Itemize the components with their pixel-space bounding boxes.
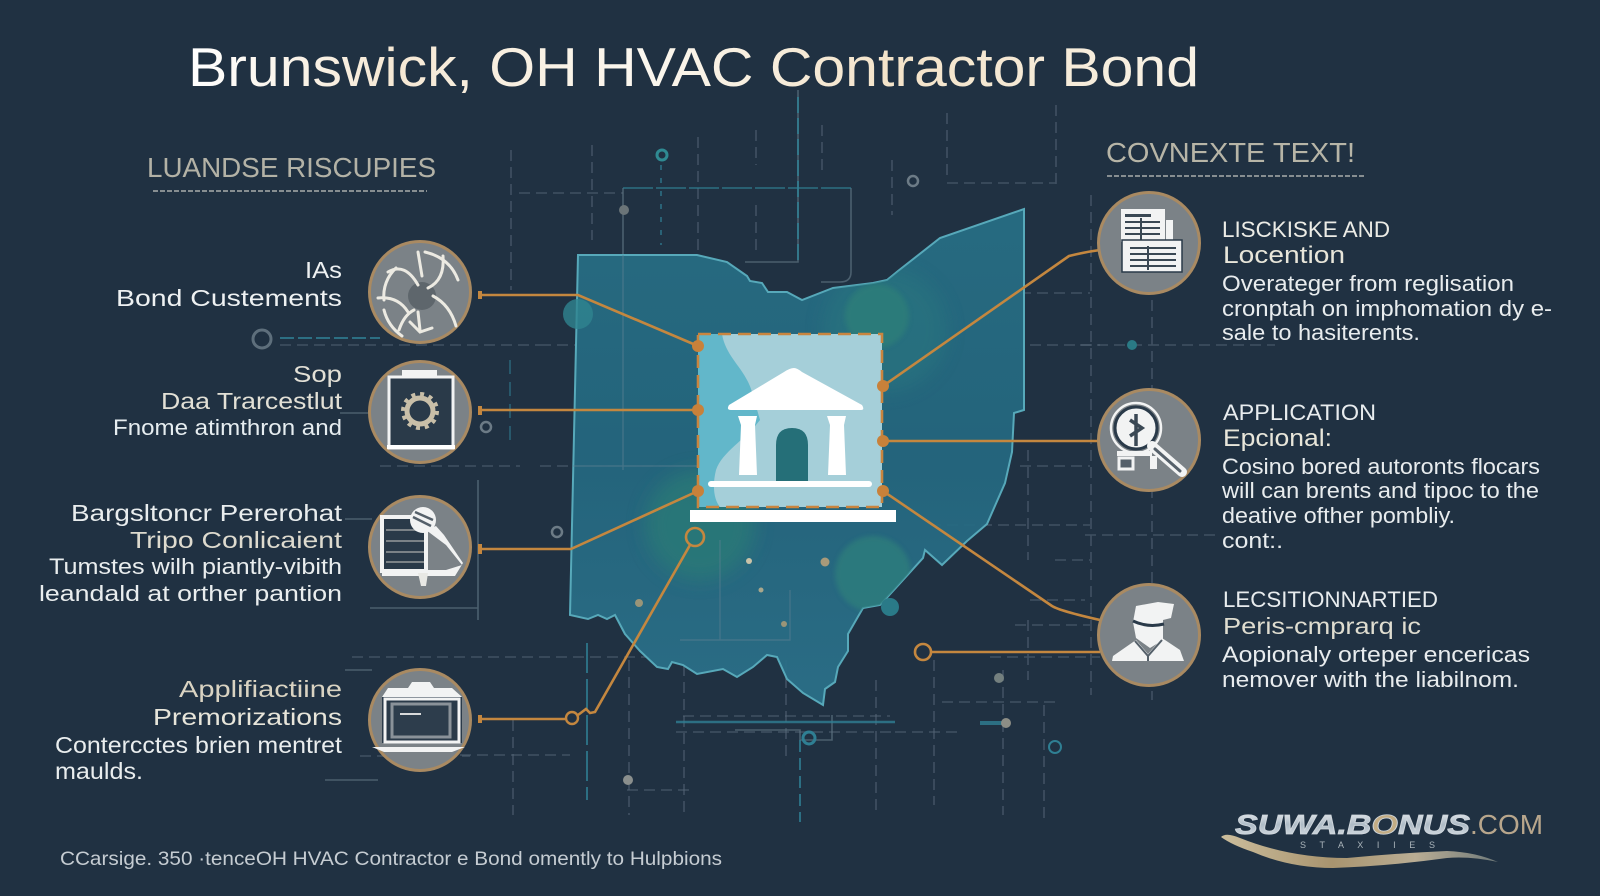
logo: S T A X I I E S — [1300, 840, 1435, 850]
icon: right circle 3 person — [1098, 584, 1200, 686]
background circuit pattern — [253, 90, 1275, 822]
right heading: COVNEXTE TEXT! — [1106, 137, 1355, 168]
right item 2 text — [1221, 400, 1540, 553]
left item 3 text: Tumstes wilh piantly-vibith — [49, 554, 342, 579]
left heading: LUANDSE RISCUPIES — [147, 152, 436, 183]
left item 3 text — [39, 500, 343, 606]
logo: .COM — [1470, 809, 1543, 840]
icon: right circle 2 magnifier — [1098, 390, 1200, 490]
left item 4 text: Premorizations — [153, 704, 342, 730]
left item 3 text: Tripo Conlicaient — [130, 527, 343, 553]
left item 4 text: maulds. — [55, 758, 143, 784]
left item 2 text: Sop — [293, 361, 342, 387]
left item 4 text: Applifiactiine — [179, 676, 342, 702]
right item 2 text: cont:. — [1222, 528, 1283, 553]
right item 1 text: Overateger from reglisation — [1222, 271, 1514, 296]
left item 2 text: Daa Trarcestlut — [161, 388, 343, 414]
footer note: CCarsige. 350 ·tenceOH HVAC Contractor e Bond omently to Hulpbions — [60, 848, 722, 870]
right item 2 text: Cosino bored autoronts flocars — [1222, 454, 1540, 479]
left item 1 text: Bond Custements — [116, 285, 342, 311]
icon: left circle 3 window and tool — [370, 496, 470, 598]
right item 3 text: LECSITIONNARTIED — [1223, 587, 1438, 612]
left item 1 text — [116, 257, 342, 311]
title: Brunswick, OH HVAC Contractor Bond — [188, 36, 1199, 98]
left item 1 text: IAs — [305, 257, 342, 283]
left item 4 text: Contercctes brien mentret — [55, 732, 343, 758]
base bar — [690, 510, 896, 522]
right item 1 text: Locention — [1223, 242, 1345, 269]
right item 1 text — [1222, 217, 1552, 345]
left item 3 text: Bargsltoncr Pererohat — [71, 500, 343, 526]
right item 3 text: nemover with the liabilnom. — [1222, 667, 1519, 692]
right item 1 text: cronptah on imphomation dy e- — [1222, 296, 1552, 321]
icon: bank building — [708, 368, 872, 487]
right item 2 text: deative ofther pombliy. — [1222, 503, 1455, 528]
icon: left circle 1 fan — [370, 242, 470, 342]
left item 2 text — [113, 361, 343, 440]
icon: left circle 2 clipboard gear — [370, 362, 470, 462]
icon: right circle 1 documents — [1098, 192, 1200, 294]
connector nodes — [692, 340, 889, 497]
icon: left circle 4 monitor — [370, 670, 470, 770]
logo: SUWA.B ONUS — [1235, 809, 1470, 840]
right item 2 text: will can brents and tipoc to the — [1221, 478, 1539, 503]
right item 2 text: Epcional: — [1223, 425, 1332, 452]
left item 4 text — [55, 676, 343, 784]
right item 2 text: APPLICATION — [1223, 400, 1376, 425]
connector lines — [480, 250, 1100, 724]
map of Ohio — [540, 188, 1024, 705]
right item 3 text — [1222, 587, 1530, 692]
central bank panel — [690, 334, 896, 522]
left item 3 text: leandald at orther pantion — [39, 581, 342, 606]
right item 1 text: sale to hasiterents. — [1222, 320, 1420, 345]
right item 1 text: LISCKISKE AND — [1222, 217, 1390, 242]
right item 3 text: Peris-cmprarq ic — [1223, 613, 1421, 639]
logo — [1221, 809, 1543, 868]
left item 2 text: Fnome atimthron and — [113, 415, 342, 440]
right item 3 text: Aopionaly orteper encericas — [1222, 642, 1530, 667]
